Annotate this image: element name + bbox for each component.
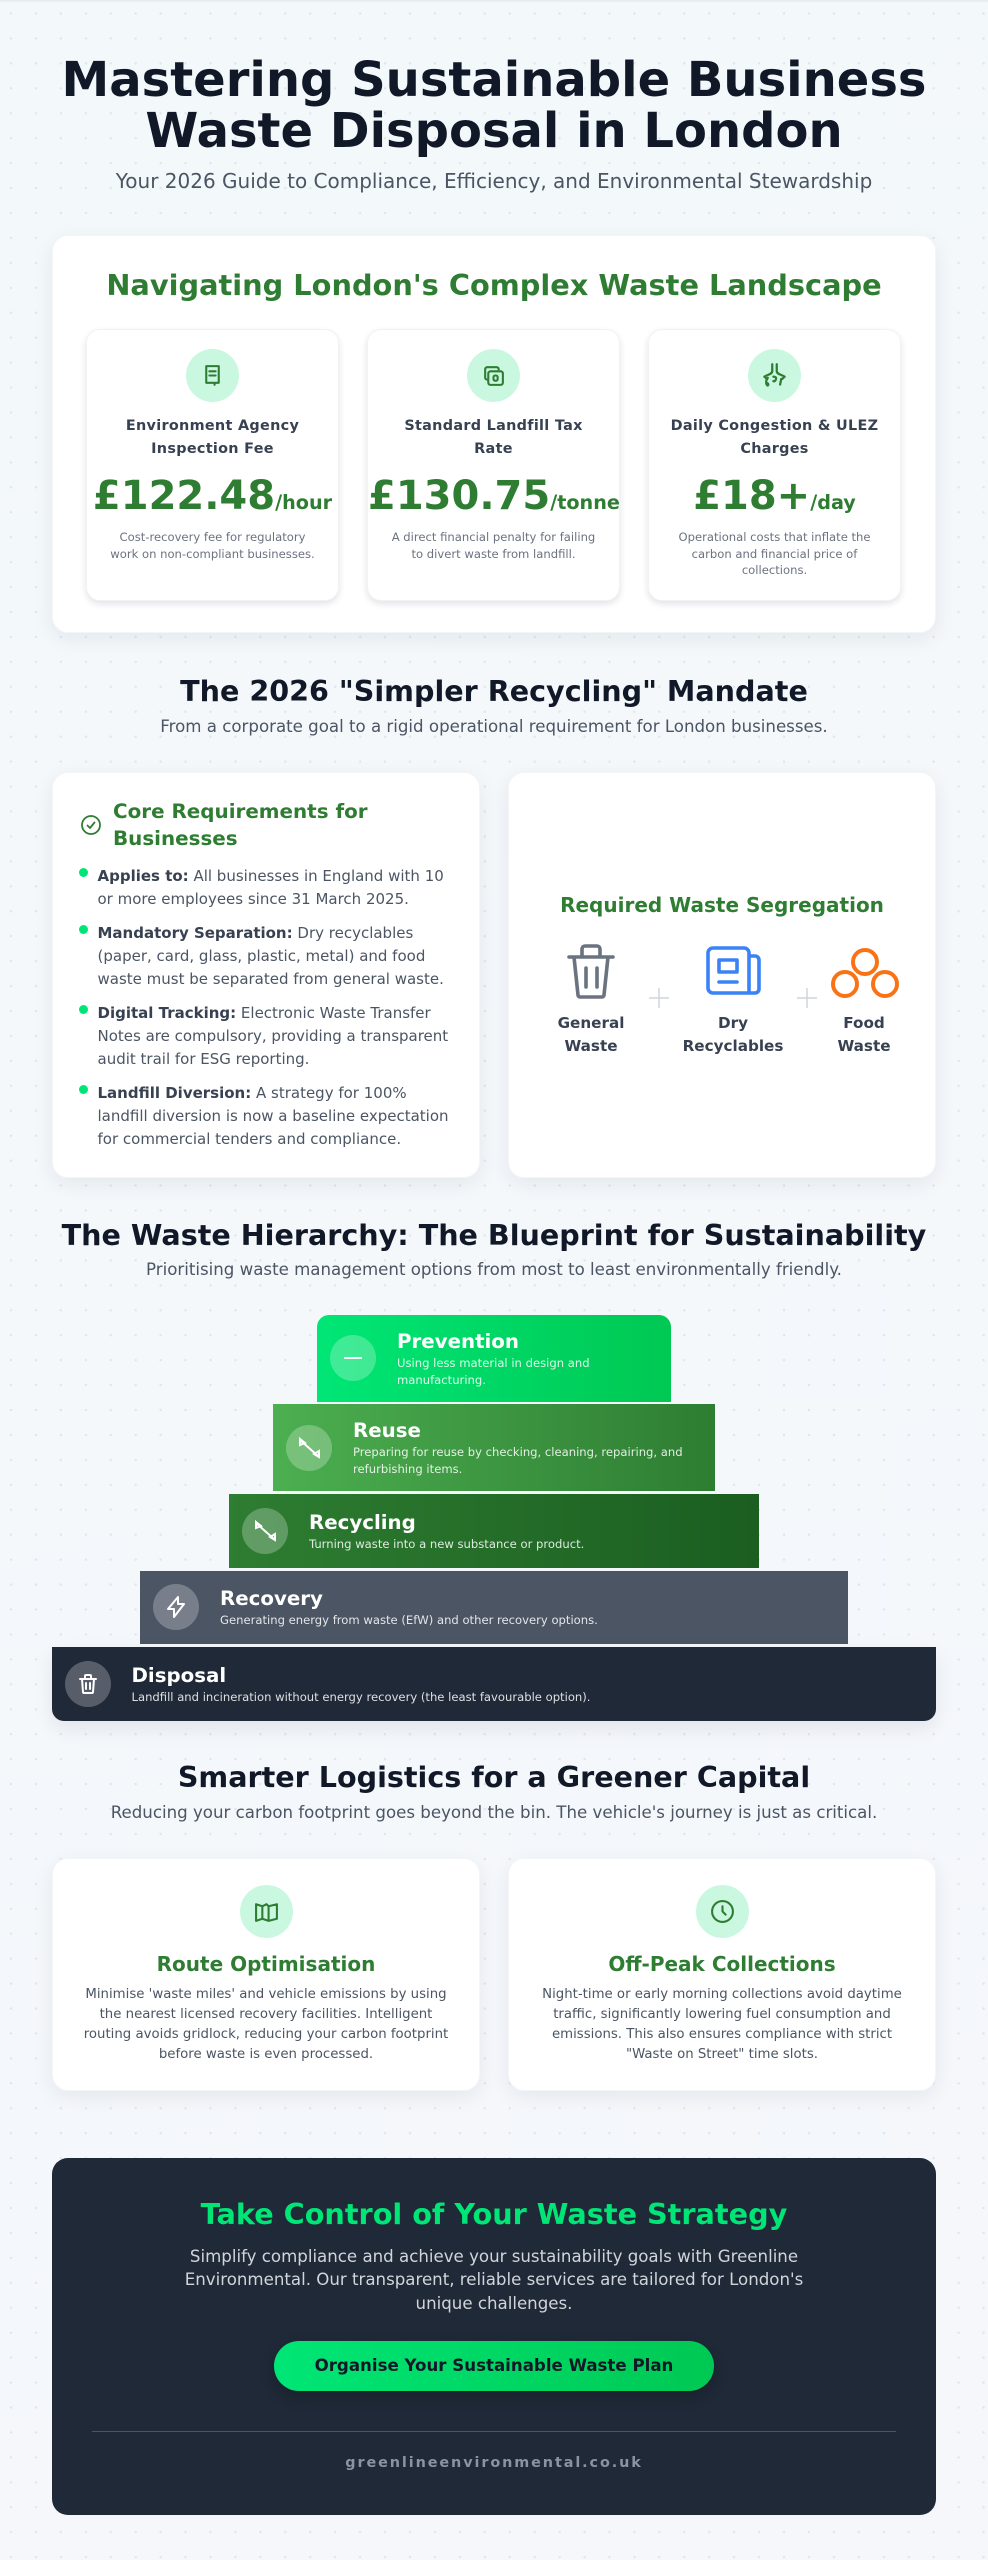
- icon: clock: [696, 1885, 749, 1938]
- requirements heading: Core Requirements for: [113, 800, 368, 823]
- panel: waste landscape: [52, 235, 936, 633]
- requirement: landfill diversion: for commercial tenders and compliance.: [98, 1130, 401, 1148]
- icon: map: [240, 1885, 293, 1938]
- card label: Rate: [474, 441, 513, 457]
- card label: Environment Agency: [126, 418, 299, 434]
- card text: traffic, significantly lowering fuel consumption and: [553, 2007, 891, 2022]
- card description: to divert waste from landfill.: [411, 546, 576, 560]
- requirement: applies to: or more employees since 31 March 2025.: [98, 890, 409, 908]
- card text: the nearest licensed recovery facilities. Intelligent: [100, 2007, 432, 2022]
- requirements heading: Businesses: [113, 827, 238, 850]
- card description: work on non-compliant businesses.: [110, 546, 315, 560]
- panel: waste segregation: [508, 772, 936, 1178]
- card description: Cost-recovery fee for regulatory: [120, 530, 305, 544]
- card label: [671, 418, 878, 457]
- card title: Off-Peak Collections: [608, 1952, 836, 1976]
- icon: plus: [649, 988, 669, 1008]
- card: landfill tax: [367, 329, 620, 601]
- card description: Operational costs that inflate the: [678, 530, 871, 544]
- stat value: £130.75/tonne: [368, 473, 620, 519]
- section heading: logistics: Smarter Logistics for a Greener Capital: [178, 1760, 810, 1794]
- icon: trash: [65, 1661, 111, 1707]
- requirement: mandatory separation: (paper, card, glass, plastic, metal) and food: [98, 947, 425, 965]
- section heading: mandate: The 2026 "Simpler Recycling" Mandate: [180, 674, 808, 708]
- requirement: mandatory separation: [98, 924, 444, 988]
- requirement: mandatory separation: waste must be separated from general waste.: [98, 970, 444, 988]
- segregation heading: Required Waste Segregation: [560, 893, 884, 917]
- footer divider: [92, 2431, 896, 2432]
- tier name: Reuse: [353, 1419, 421, 1442]
- cta heading: Take Control of Your Waste Strategy: [201, 2197, 787, 2231]
- cta text: Environmental. Our transparent, reliable services are tailored for London's: [185, 2270, 803, 2289]
- title: Waste Disposal in London: [145, 103, 843, 159]
- title: [62, 52, 926, 159]
- tier name: Recycling: [309, 1511, 416, 1534]
- card description: [110, 530, 315, 560]
- tier description: Generating energy from waste (EfW) and other recovery options.: [220, 1613, 598, 1627]
- card text: [84, 1986, 448, 2062]
- label: dry recyclables: Dry: [718, 1014, 748, 1032]
- card text: before waste is even processed.: [159, 2047, 373, 2062]
- label: general waste: General: [558, 1014, 624, 1032]
- section subheading: logistics: Reducing your carbon footprint goes beyond the bin. The vehicle's journey is just as critical.: [111, 1803, 877, 1822]
- label: general waste: Waste: [564, 1037, 618, 1055]
- tier: reuse: [273, 1404, 715, 1491]
- icon: food waste rings: [831, 948, 899, 998]
- card label: Inspection Fee: [151, 441, 274, 457]
- card text: [542, 1986, 902, 2062]
- requirement: landfill diversion: [98, 1084, 449, 1148]
- requirement: digital tracking: audit trail for ESG reporting.: [98, 1050, 309, 1068]
- tier description: manufacturing.: [397, 1373, 486, 1387]
- card text: emissions. This also ensures compliance with strict: [552, 2027, 892, 2042]
- requirement: applies to: [98, 867, 444, 908]
- cta button: [274, 2341, 714, 2391]
- cta text: unique challenges.: [416, 2294, 572, 2313]
- tier description: [353, 1445, 683, 1476]
- card label: Charges: [740, 441, 809, 457]
- requirement: digital tracking: Digital Tracking: Electronic Waste Transfer: [98, 1004, 431, 1022]
- panel: route optimisation: [52, 1858, 480, 2091]
- tier description: [397, 1356, 590, 1387]
- card description: collections.: [742, 563, 807, 577]
- card: inspection fee: [86, 329, 339, 601]
- card description: [678, 530, 871, 577]
- card label: [404, 418, 583, 457]
- pyramid: waste hierarchy: [50, 1315, 938, 1730]
- label: general waste: [558, 1014, 624, 1055]
- tier: recovery: [140, 1571, 848, 1644]
- requirement: landfill diversion: Landfill Diversion: A strategy for 100%: [98, 1084, 407, 1102]
- icon: plus: [797, 988, 817, 1008]
- icon: check circle: [81, 815, 101, 835]
- section subheading: hierarchy: Prioritising waste management options from most to least environmentally friendly.: [146, 1260, 842, 1279]
- icon: lightning bolt: [153, 1584, 199, 1630]
- icon: banknotes: [467, 349, 520, 402]
- panel: core requirements: [52, 772, 480, 1178]
- requirement: landfill diversion: landfill diversion is now a baseline expectation: [98, 1107, 449, 1125]
- icon: document: [186, 349, 239, 402]
- requirement: applies to: Applies to: All businesses in England with 10: [98, 867, 444, 885]
- tier name: Recovery: [220, 1587, 323, 1610]
- cta button: Organise Your Sustainable Waste Plan: [315, 2356, 673, 2375]
- subtitle: Your 2026 Guide to Compliance, Efficiency, and Environmental Stewardship: [116, 169, 872, 193]
- card label: Standard Landfill Tax: [404, 418, 583, 434]
- tier: recycling: [229, 1494, 759, 1568]
- card text: routing avoids gridlock, reducing your carbon footprint: [84, 2027, 448, 2042]
- label: food waste: Food: [843, 1014, 885, 1032]
- tier name: Prevention: [397, 1330, 519, 1353]
- bullet dot: [79, 868, 88, 877]
- icon: congestion: [748, 349, 801, 402]
- tier description: Preparing for reuse by checking, cleaning, repairing, and: [353, 1445, 683, 1459]
- requirement: digital tracking: [98, 1004, 448, 1068]
- icon: minus: [330, 1335, 376, 1381]
- bullet dot: [79, 1005, 88, 1014]
- cta text: [185, 2247, 803, 2313]
- requirements heading: [113, 800, 368, 850]
- tier: prevention: [317, 1315, 671, 1402]
- tier description: refurbishing items.: [353, 1462, 462, 1476]
- label: food waste: [837, 1014, 891, 1055]
- label: dry recyclables: Recyclables: [683, 1037, 783, 1055]
- tier description: Landfill and incineration without energy recovery (the least favourable option).: [132, 1690, 590, 1704]
- icon: trash bin: [567, 944, 615, 999]
- card label: [126, 418, 299, 457]
- requirement: mandatory separation: Mandatory Separation: Dry recyclables: [98, 924, 413, 942]
- tier description: Using less material in design and: [397, 1356, 590, 1370]
- section subheading: mandate: From a corporate goal to a rigid operational requirement for London businesses.: [160, 717, 828, 736]
- card label: Daily Congestion & ULEZ: [671, 418, 878, 434]
- website: greenlineenvironmental.co.uk: [345, 2455, 643, 2471]
- section heading: hierarchy: The Waste Hierarchy: The Blueprint for Sustainability: [62, 1218, 926, 1252]
- card description: carbon and financial price of: [692, 546, 857, 560]
- panel: off-peak collections: [508, 1858, 936, 2091]
- stat value: £18+/day: [693, 473, 856, 519]
- tier: disposal: [52, 1647, 936, 1721]
- card text: "Waste on Street" time slots.: [626, 2047, 818, 2062]
- bullet dot: [79, 1085, 88, 1094]
- icon: line with triangle ends: [242, 1508, 288, 1554]
- card description: A direct financial penalty for failing: [392, 530, 595, 544]
- cta text: Simplify compliance and achieve your sustainability goals with Greenline: [190, 2247, 798, 2266]
- card text: Minimise 'waste miles' and vehicle emissions by using: [85, 1986, 447, 2002]
- card title: Route Optimisation: [157, 1952, 375, 1976]
- stat value: £122.48/hour: [93, 473, 332, 519]
- panel: call to action: [52, 2158, 936, 2515]
- tier description: Turning waste into a new substance or product.: [309, 1537, 584, 1551]
- label: dry recyclables: [683, 1014, 783, 1055]
- card text: Night-time or early morning collections avoid daytime: [542, 1986, 902, 2002]
- requirement: digital tracking: Notes are compulsory, providing a transparent: [98, 1027, 448, 1045]
- title: Mastering Sustainable Business: [62, 52, 926, 108]
- card: congestion charges: [648, 329, 901, 601]
- panel heading: Navigating London's Complex Waste Landscape: [106, 268, 882, 302]
- tier name: Disposal: [132, 1664, 226, 1687]
- label: food waste: Waste: [837, 1037, 891, 1055]
- card description: [392, 530, 595, 560]
- bullet dot: [79, 925, 88, 934]
- icon: line with triangle ends: [286, 1425, 332, 1471]
- icon: newspaper: [706, 946, 761, 995]
